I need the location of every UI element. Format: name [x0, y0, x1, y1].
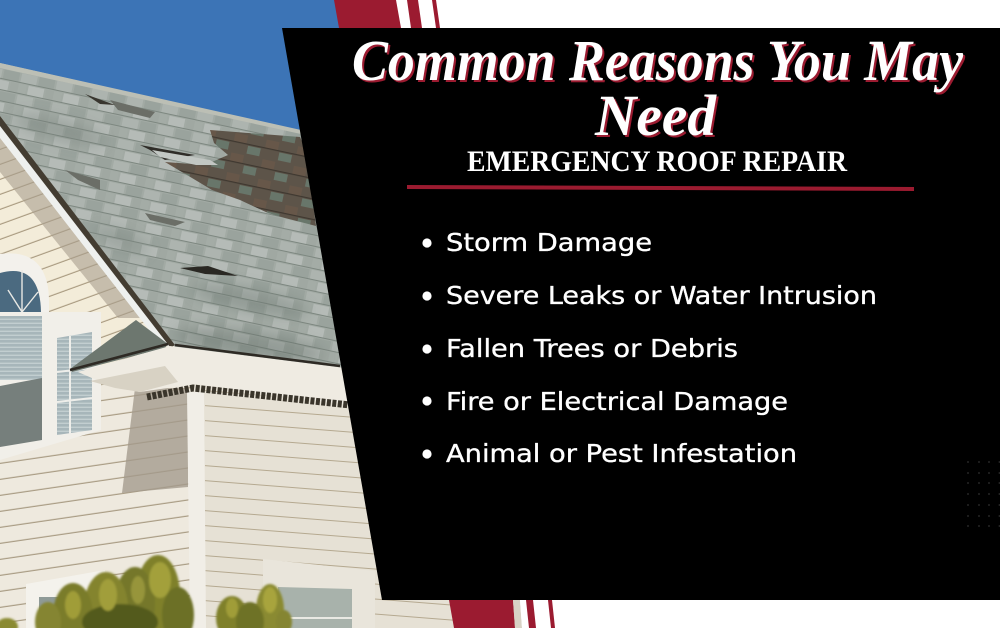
title line 2: Need: [594, 83, 717, 148]
list of reasons: [422, 228, 877, 468]
dark eave line: [70, 344, 340, 370]
shrubs: [0, 555, 292, 628]
reason: storm damage: Storm Damage: [446, 228, 652, 257]
arch muntins: [8, 270, 38, 312]
arch glass: [0, 271, 41, 312]
torn shingle gaps: [140, 145, 195, 160]
title: [352, 28, 963, 148]
arch frame: [0, 253, 49, 330]
left rake trim: [0, 116, 175, 348]
lower sash glass: [0, 378, 42, 447]
left wall siding: [0, 366, 190, 628]
top red stripes: [334, 0, 440, 28]
reason: fire: Fire or Electrical Damage: [446, 387, 788, 416]
soffit: [78, 346, 350, 405]
lower roof hip: [70, 320, 168, 372]
sky: [0, 0, 345, 140]
side window muntins: [57, 336, 92, 434]
reason: fallen trees: Fallen Trees or Debris: [446, 334, 738, 363]
upper sash glass: [0, 316, 42, 380]
bottom red stripes: [449, 600, 555, 628]
corner shrub: [0, 618, 18, 628]
corner post: [187, 392, 206, 628]
gable siding: [0, 110, 180, 420]
right lower frame: [263, 559, 375, 628]
left lower frame: [26, 570, 105, 628]
decorative dot grid: [967, 461, 1000, 527]
roof ridge highlight: [0, 63, 310, 136]
soffit shadow: [90, 366, 178, 392]
arched window: [0, 253, 101, 460]
missing shingles patch: [165, 130, 316, 226]
lower window frames: [26, 559, 375, 628]
wall shadow: [122, 388, 188, 493]
weathered dark blotches: [14, 109, 326, 368]
title line 1: Common Reasons You May: [352, 28, 963, 93]
reason: animal: Animal or Pest Infestation: [446, 439, 797, 468]
shingles: [0, 63, 360, 372]
right wall siding: [205, 390, 520, 628]
photo: house with damaged roof: [0, 0, 520, 628]
black content panel: [282, 28, 1000, 600]
reason: leaks: Severe Leaks or Water Intrusion: [446, 281, 877, 310]
dentil band: [147, 388, 350, 405]
wall siding below the panel: [0, 340, 520, 628]
small shrub: [216, 584, 292, 628]
dark missing strips: [110, 100, 155, 118]
subtitle: EMERGENCY ROOF REPAIR: [467, 145, 847, 178]
lower window frame: [0, 312, 101, 460]
red divider: [407, 185, 914, 191]
right lower glass: [278, 587, 352, 628]
side window glass: [57, 332, 92, 435]
gable shadow: [0, 130, 140, 318]
roof: [0, 63, 360, 372]
eave and soffit: [70, 320, 350, 405]
large shrub: [35, 555, 194, 628]
